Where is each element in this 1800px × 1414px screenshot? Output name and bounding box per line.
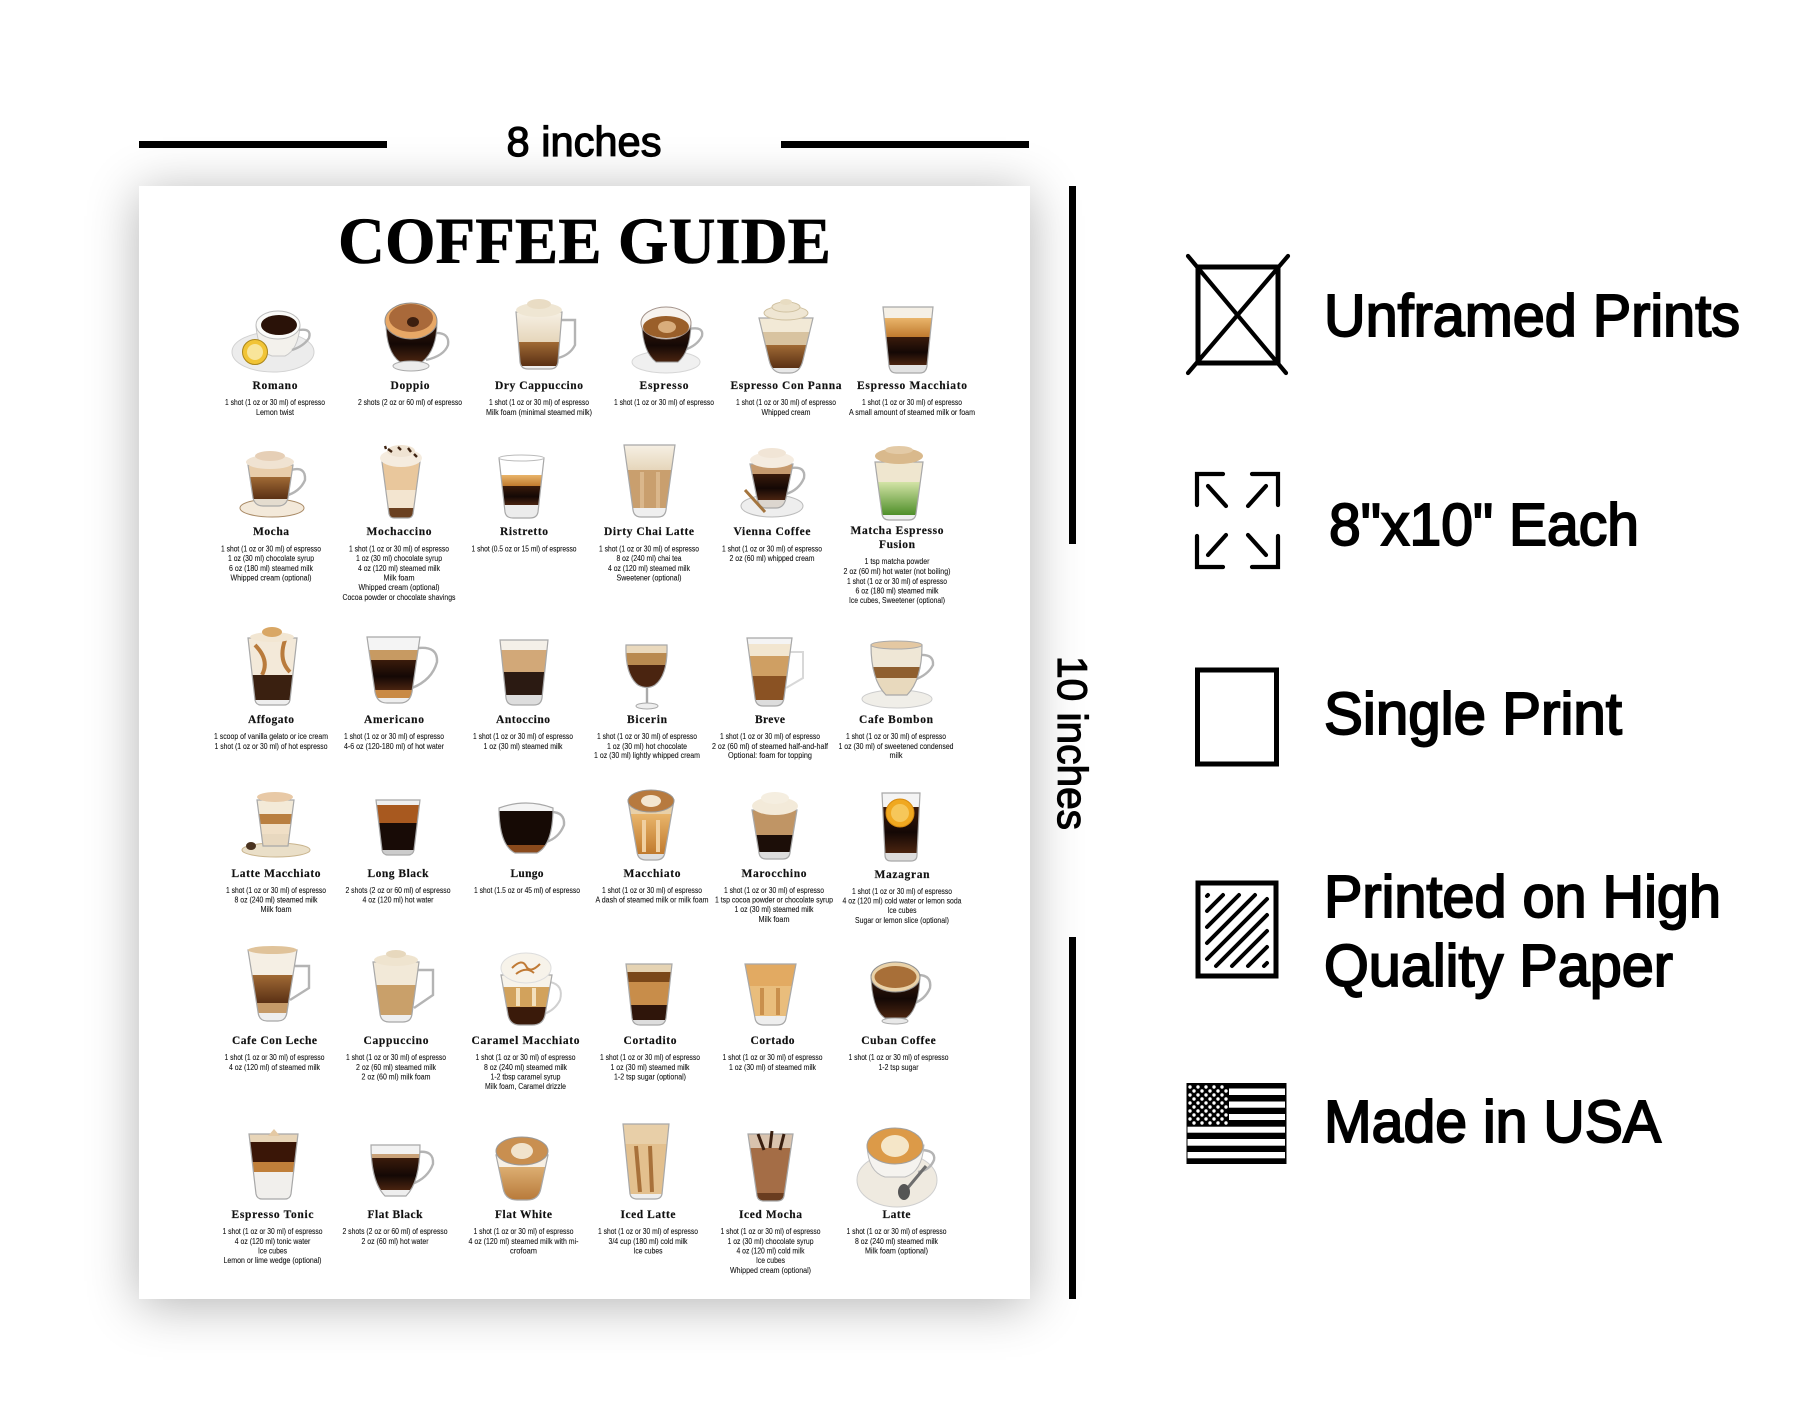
panel: Dry Cappuccino [486, 299, 592, 417]
name: Matcha Espresso [850, 525, 944, 537]
icon: Dry Cappuccino mug [510, 299, 575, 369]
icon: Cafe Bombon cup [862, 641, 933, 708]
icon: Vienna Coffee cup [741, 448, 804, 517]
name: Americano [364, 714, 424, 726]
ingredients: Ice cubes [888, 905, 916, 915]
name: Cortadito [624, 1035, 677, 1047]
panel: Americano [344, 637, 444, 751]
ingredients [222, 1226, 323, 1265]
ingredients: A dash of steamed milk or milk foam [596, 894, 709, 904]
ingredients: 1 shot (1 oz or 30 ml) of espresso [473, 731, 573, 741]
ingredients: 4 oz (120 ml) hot water [362, 894, 434, 904]
ingredients: 1 scoop of vanilla gelato or ice cream [214, 731, 328, 741]
panel: Doppio [358, 303, 462, 407]
ingredients: 3/4 cup (180 ml) cold milk [608, 1236, 688, 1246]
icon: Breve mug [745, 638, 803, 706]
icon: Matcha Espresso Fusion glass [872, 446, 926, 520]
ingredients: 1 shot (1 oz or 30 ml) of espresso [226, 885, 326, 895]
icon: Flat Black mug [369, 1145, 433, 1196]
name: Mochaccino [366, 526, 432, 538]
panel: Dirty Chai Latte [599, 445, 699, 582]
ingredients [476, 1052, 576, 1091]
panel: Matcha Espresso Fusion [844, 446, 951, 605]
ingredients [225, 397, 325, 417]
ingredients: Ice cubes [634, 1246, 662, 1256]
ingredients: Milk foam [260, 904, 292, 914]
ingredients [214, 731, 328, 751]
icon: Caramel Macchiato mug [499, 953, 561, 1025]
icon: Espresso cup [632, 307, 702, 373]
ingredients: 1 shot (1 oz or 30 ml) of espresso [597, 731, 697, 741]
name: Latte [882, 1209, 910, 1221]
ingredients: 1 oz (30 ml) lightly whipped cream [594, 750, 700, 760]
ingredients [712, 731, 829, 760]
ingredients: 1 oz (30 ml) hot chocolate [607, 741, 687, 751]
ingredients: 1 oz (30 ml) chocolate syrup [356, 553, 442, 563]
ingredients: 1 shot (1 oz or 30 ml) of espresso [476, 1052, 576, 1062]
label: Printed on High Quality Paper: Printed on High [1324, 864, 1721, 930]
name: Mocha [253, 526, 289, 538]
ingredients: A small amount of steamed milk or foam [849, 407, 975, 417]
icon: Affogato glass [245, 627, 300, 705]
ingredients: 4 oz (120 ml) tonic water [235, 1236, 310, 1246]
ingredients: Whipped cream (optional) [730, 1265, 811, 1275]
ingredients: 1 shot (1 oz or 30 ml) of espresso [722, 544, 822, 554]
ingredients: 4 oz (120 ml) steamed milk [608, 563, 691, 573]
ingredients: 1 shot (1 oz or 30 ml) of espresso [598, 1226, 698, 1236]
name: Cafe Con Leche [232, 1035, 317, 1047]
name: Breve [755, 714, 785, 726]
icon: Mochaccino glass [380, 445, 422, 518]
icon: Mazagran tall glass with lemon [880, 793, 922, 861]
name: Antoccino [496, 714, 550, 726]
label: 8x10 each: 8"x10" Each [1329, 492, 1639, 558]
panel: Espresso Macchiato [849, 307, 975, 417]
ingredients: Milk foam, Caramel drizzle [485, 1081, 566, 1091]
icon: Cafe Con Leche mug [246, 946, 309, 1021]
ingredients: 1 shot (1 oz or 30 ml) of espresso [346, 1052, 446, 1062]
ingredients: 1 shot (1 oz or 30 ml) of espresso [722, 1052, 823, 1062]
ingredients: 1 shot (1 oz or 30 ml) of espresso [846, 731, 946, 741]
ingredients [596, 885, 709, 904]
ingredients: 1 shot (1 oz or 30 ml) of espresso [862, 397, 962, 407]
ingredients: crofoam [510, 1246, 537, 1256]
icon: Dirty Chai Latte glass [620, 445, 680, 517]
ingredients: 8 oz (240 ml) steamed milk [855, 1236, 939, 1246]
name: Affogato [248, 714, 294, 726]
ingredients: Milk foam [758, 914, 790, 924]
ingredients: 1 oz (30 ml) steamed milk [610, 1062, 690, 1072]
ingredients: 4 oz (120 ml) cold water or lemon soda [842, 896, 962, 906]
label: Single Print: Single Print [1324, 681, 1622, 747]
ingredients: 2 oz (60 ml) hot water (not boiling) [844, 566, 951, 576]
name [850, 525, 944, 551]
ingredients: Ice cubes [258, 1246, 287, 1256]
ingredients: 1 shot (1 oz or 30 ml) of espresso [349, 544, 449, 554]
ingredients [842, 886, 962, 925]
ingredients: 1 shot (1 oz or 30 ml) of espresso [847, 576, 947, 586]
ingredients: 1 oz (30 ml) of steamed milk [729, 1062, 817, 1072]
ingredients: 1 shot (1 oz or 30 ml) of espresso [600, 1052, 700, 1062]
ingredients [736, 397, 836, 417]
icon: Iced Latte tall glass [621, 1124, 671, 1199]
ingredients [598, 1226, 698, 1256]
icon: Cappuccino mug [371, 950, 433, 1022]
panel: Marocchino [715, 792, 833, 924]
icon: Cortadito glass [624, 964, 674, 1025]
panel: Antoccino [473, 640, 573, 751]
ingredients: 4 oz (120 ml) of steamed milk [229, 1062, 321, 1072]
icon: Iced Mocha tall glass [746, 1131, 795, 1201]
panel: Cuban Coffee [848, 962, 949, 1072]
name: Iced Latte [620, 1209, 676, 1221]
ingredients [226, 885, 326, 914]
name: Fusion [879, 539, 916, 551]
panel: Caramel Macchiato [472, 953, 580, 1091]
icon: Antoccino glass [498, 640, 550, 705]
ingredients [486, 397, 592, 417]
icon: USA flag [1186, 1083, 1286, 1164]
ingredients: 2 oz (60 ml) steamed milk [356, 1062, 437, 1072]
panel: Bicerin [594, 645, 700, 760]
ingredients [844, 556, 951, 605]
icon: Long Black glass [374, 800, 422, 855]
ingredients [346, 1052, 446, 1082]
ingredients [342, 544, 456, 602]
ingredients: 1 tsp matcha powder [864, 556, 930, 566]
name: Long Black [368, 868, 429, 880]
ingredients: 1 shot (1 oz or 30 ml) of espresso [599, 544, 699, 554]
panel: Latte [846, 1128, 947, 1256]
ingredients [599, 544, 699, 582]
panel: Espresso [614, 307, 714, 407]
name: Flat White [495, 1209, 552, 1221]
ingredients: 1 tsp cocoa powder or chocolate syrup [715, 894, 833, 904]
ingredients: 8 oz (240 ml) steamed milk [484, 1062, 568, 1072]
name: Romano [252, 380, 298, 392]
icon: single print frame [1198, 670, 1276, 764]
ingredients: 1 shot (1 oz or 30 ml) of espresso [852, 886, 952, 896]
ingredients: Ice cubes, Sweetener (optional) [849, 595, 945, 605]
width dimension: 8 inches [139, 118, 1029, 165]
icon: unframed prints crossed frame [1188, 256, 1288, 373]
name: Espresso Tonic [232, 1209, 314, 1221]
name: Dry Cappuccino [495, 380, 583, 392]
ingredients: Whipped cream (optional) [230, 572, 312, 582]
icon: Flat White glass [494, 1137, 550, 1200]
name: Bicerin [627, 714, 668, 726]
ingredients: Milk foam (minimal steamed milk) [486, 407, 592, 417]
ingredients: Sugar or lemon slice (optional) [855, 915, 949, 925]
icon: Doppio glass [385, 303, 448, 371]
panel: Iced Latte [598, 1124, 698, 1256]
ingredients: 2 shots (2 oz or 60 ml) of espresso [342, 1226, 448, 1236]
ingredients: 1 shot (1 oz or 30 ml) of espresso [724, 885, 824, 895]
panel: Espresso Tonic [222, 1129, 323, 1265]
ingredients: Lemon twist [256, 407, 295, 417]
panel: Flat Black [342, 1145, 448, 1246]
name: Doppio [390, 380, 430, 392]
ingredients: 1 shot (1 oz or 30 ml) of espresso [846, 1226, 947, 1236]
ingredients: 1 shot (1 oz or 30 ml) of espresso [489, 397, 589, 407]
icon: Cuban Coffee cup [871, 962, 930, 1024]
icon: Romano cup with lemon [232, 311, 314, 372]
name: Espresso [640, 380, 689, 392]
ingredients [720, 1226, 821, 1275]
icon: Espresso Macchiato glass [880, 307, 936, 373]
ingredients: Optional: foam for topping [728, 750, 812, 760]
ingredients: 1 shot (1 oz or 30 ml) of hot espresso [214, 741, 328, 751]
ingredients: 1 shot (1 oz or 30 ml) of espresso [224, 1052, 325, 1062]
ingredients: 1 shot (1 oz or 30 ml) of espresso [474, 1226, 574, 1236]
ingredients: 4 oz (120 ml) steamed milk [358, 563, 441, 573]
ingredients: 2 oz (60 ml) milk foam [362, 1072, 431, 1082]
icon: Bicerin stemmed glass [624, 645, 670, 709]
panel: Iced Mocha [720, 1131, 821, 1275]
ingredients: milk [890, 750, 903, 760]
ingredients: Whipped cream [762, 407, 811, 417]
ingredients: 1 oz (30 ml) steamed milk [484, 741, 563, 751]
panel: Cappuccino [346, 950, 446, 1082]
ingredients: 1 shot (1 oz or 30 ml) of espresso [736, 397, 836, 407]
ingredients: 1 shot (1 oz or 30 ml) of espresso [720, 1226, 821, 1236]
ingredients [473, 731, 573, 751]
name: Espresso Macchiato [857, 380, 967, 392]
height dimension: 10 inches: 10 inches [1049, 656, 1096, 830]
name: Marocchino [742, 868, 807, 880]
panel: Affogato [214, 627, 328, 751]
icon: Lungo mug [497, 802, 564, 853]
panel: Romano [225, 311, 325, 417]
ingredients [715, 885, 833, 924]
ingredients: 6 oz (180 ml) steamed milk [229, 563, 314, 573]
panel: Espresso Con Panna [730, 299, 842, 417]
ingredients: 2 shots (2 oz or 60 ml) of espresso [346, 885, 451, 895]
name: Latte Macchiato [232, 868, 321, 880]
panel: Latte Macchiato [226, 792, 326, 914]
ingredients: 4-6 oz (120-180 ml) of hot water [344, 741, 444, 751]
ingredients: 6 oz (180 ml) steamed milk [856, 586, 939, 596]
ingredients: 4 oz (120 ml) cold milk [736, 1246, 805, 1256]
ingredients [594, 731, 700, 760]
ingredients [346, 885, 451, 904]
icon: Mocha cup [240, 451, 305, 517]
icon: Espresso Tonic glass [247, 1129, 300, 1199]
name: Ristretto [500, 526, 548, 538]
panel: Mazagran [842, 793, 962, 925]
name: Mazagran [874, 869, 930, 881]
name: Caramel Macchiato [472, 1035, 580, 1047]
name: Cortado [750, 1035, 795, 1047]
name: Cappuccino [364, 1035, 429, 1047]
height dimension: 10 inches [1049, 186, 1096, 1299]
label: Made in USA: Made in USA [1324, 1089, 1662, 1155]
ingredients: 8 oz (240 ml) steamed milk [234, 894, 318, 904]
panel: poster sheet with shadow [139, 186, 1030, 1299]
ingredients [838, 731, 954, 760]
ingredients: 2 oz (60 ml) of steamed half-and-half [712, 741, 829, 751]
title: COFFEE GUIDE [338, 205, 831, 278]
panel: Cafe Bombon [838, 641, 954, 760]
name: Espresso Con Panna [730, 380, 842, 392]
ingredients: Sweetener (optional) [616, 572, 682, 582]
ingredients: 4 oz (120 ml) steamed milk with mi- [468, 1236, 579, 1246]
ingredients: 1 shot (1 oz or 30 ml) of espresso [344, 731, 444, 741]
name: Dirty Chai Latte [604, 526, 694, 538]
ingredients [224, 1052, 325, 1072]
ingredients: 1 shot (1 oz or 30 ml) of espresso [720, 731, 820, 741]
panel: Long Black [346, 800, 451, 904]
ingredients [600, 1052, 700, 1082]
icon: Latte cup with spoon [857, 1128, 937, 1207]
panel: Mocha [221, 451, 321, 582]
label: Printed on High Quality Paper [1324, 864, 1721, 999]
ingredients: 1 shot (1 oz or 30 ml) of espresso [221, 544, 321, 554]
ingredients: 1 shot (1 oz or 30 ml) of espresso [222, 1226, 323, 1236]
icon: Espresso Con Panna glass [755, 299, 817, 373]
ingredients: 1 shot (1 oz or 30 ml) of espresso [602, 885, 702, 895]
icon: Americano mug [365, 637, 437, 703]
ingredients: 1 shot (1 oz or 30 ml) of espresso [848, 1052, 949, 1062]
width dimension: 8 inches: 8 inches [506, 118, 662, 165]
icon: Latte Macchiato glass [242, 792, 310, 857]
ingredients: 1 shot (1.5 oz or 45 ml) of espresso [474, 885, 580, 895]
ingredients: 1 oz (30 ml) steamed milk [734, 904, 814, 914]
panel: Cafe Con Leche [224, 946, 325, 1072]
ingredients: 1 shot (1 oz or 30 ml) of espresso [225, 397, 325, 407]
label: Printed on High Quality Paper: Quality Paper [1324, 933, 1673, 999]
ingredients [722, 544, 822, 563]
ingredients: 1 oz (30 ml) chocolate syrup [228, 553, 314, 563]
ingredients: 1-2 tsp sugar [878, 1062, 919, 1072]
panel: Macchiato [596, 790, 709, 904]
panel: Lungo [474, 802, 580, 895]
panel: Mochaccino [342, 445, 456, 602]
name: Macchiato [624, 868, 681, 880]
ingredients: 2 oz (60 ml) hot water [362, 1236, 429, 1246]
panel: Flat White [468, 1137, 579, 1256]
ingredients: 1-2 tsp sugar (optional) [614, 1072, 686, 1082]
name: Flat Black [368, 1209, 423, 1221]
ingredients [344, 731, 444, 751]
panel: Breve [712, 638, 829, 760]
ingredients [342, 1226, 448, 1246]
ingredients: 1 shot (1 oz or 30 ml) of espresso [614, 397, 714, 407]
panel: Vienna Coffee [722, 448, 822, 563]
ingredients: Ice cubes [756, 1255, 785, 1265]
panel: Cortadito [600, 964, 700, 1082]
name: Cuban Coffee [861, 1035, 936, 1047]
name: Lungo [510, 868, 544, 880]
ingredients [722, 1052, 823, 1072]
ingredients: Cocoa powder or chocolate shavings [342, 592, 456, 602]
name: Vienna Coffee [734, 526, 810, 538]
ingredients: 1 oz (30 ml) of sweetened condensed [838, 741, 954, 751]
icon: hatched paper [1198, 883, 1276, 976]
ingredients [221, 544, 321, 582]
ingredients [468, 1226, 579, 1256]
ingredients: 1 oz (30 ml) chocolate syrup [728, 1236, 814, 1246]
name: Iced Mocha [739, 1209, 802, 1221]
ingredients [849, 397, 975, 417]
ingredients: 1 shot (0.5 oz or 15 ml) of espresso [472, 544, 577, 554]
name: Cafe Bombon [859, 714, 934, 726]
ingredients: Whipped cream (optional) [358, 582, 440, 592]
ingredients: 1-2 tbsp caramel syrup [490, 1072, 561, 1082]
ingredients: 8 oz (240 ml) chai tea [616, 553, 682, 563]
panel: Cortado [722, 964, 823, 1072]
icon: Macchiato glass [626, 790, 676, 860]
icon: Cortado glass [743, 964, 798, 1025]
ingredients: Lemon or lime wedge (optional) [224, 1255, 322, 1265]
icon: Ristretto shot glass [497, 455, 547, 518]
ingredients: 2 shots (2 oz or 60 ml) of espresso [358, 397, 462, 407]
icon: size arrows [1197, 474, 1278, 567]
ingredients [848, 1052, 949, 1072]
panel: Ristretto [472, 455, 577, 554]
ingredients: Milk foam [384, 572, 415, 582]
icon: Marocchino glass [750, 792, 799, 859]
ingredients: 2 oz (60 ml) whipped cream [730, 553, 815, 563]
ingredients: Milk foam (optional) [865, 1246, 928, 1256]
ingredients [846, 1226, 947, 1256]
label: Unframed Prints: Unframed Prints [1324, 283, 1740, 349]
